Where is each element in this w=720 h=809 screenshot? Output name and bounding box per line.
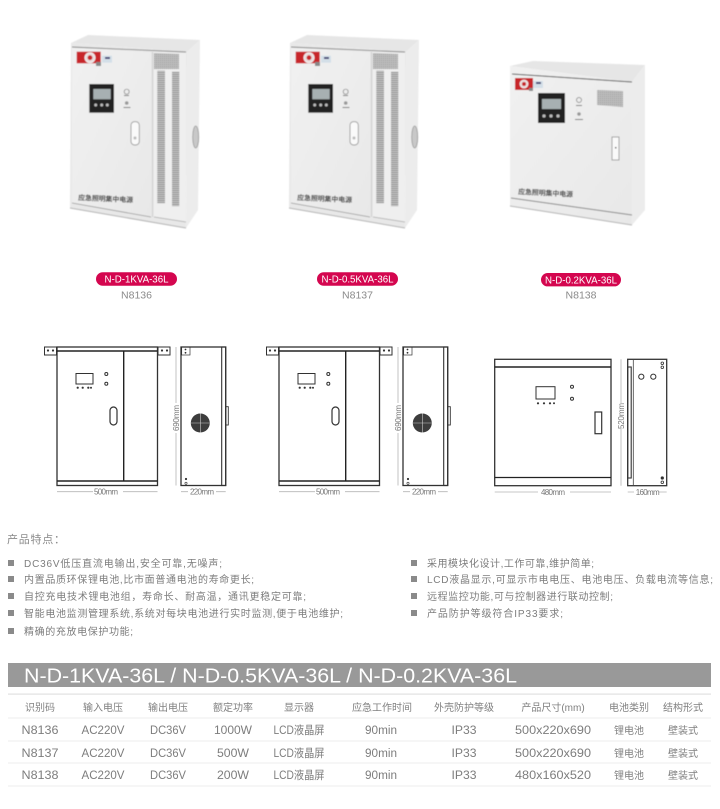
table header: 输出电压: [148, 701, 188, 714]
feature list: left column: 精确的充放电保护功能;: [24, 625, 133, 638]
model tag: N-D-0.2KVA-36L: N-D-0.2KVA-36L: [545, 275, 617, 286]
feature list: right column: 采用模块化设计,工作可靠,维护简单;: [427, 557, 594, 570]
table header: 外壳防护等级: [434, 701, 494, 714]
table row: N8138: N8138: [22, 770, 58, 782]
feature list: right column: LCD液晶显示,可显示市电电压、电池电压、负载电流等信息;: [427, 573, 713, 586]
feature list: right column: 远程监控功能,可与控制器进行联动控制;: [427, 590, 613, 603]
table header: 识别码: [25, 702, 55, 714]
feature list: left column: [8, 557, 343, 638]
table row: N8138: 壁装式: [668, 769, 698, 782]
cabinet label: 应急照明集中电源: [78, 193, 133, 204]
table row: N8136: DC36V: [150, 725, 186, 737]
dimension drawing: N8137: 220mm: [412, 488, 436, 496]
table row: N8138: 480x160x520: [515, 770, 591, 782]
model tag: N-D-1KVA-36L: N-D-1KVA-36L: [104, 275, 169, 286]
table header: 输入电压: [83, 701, 123, 714]
feature list: left column: 智能电池监测管理系统,系统对每块电池进行实时监测,便于电池维护;: [24, 607, 343, 620]
dimension drawing: N8138: 160mm: [636, 488, 660, 497]
table row: N8136: 壁装式: [668, 724, 698, 737]
table row: N8136: [22, 723, 698, 737]
table row: N8136: LCD液晶屏: [274, 723, 324, 737]
table row: N8138: LCD液晶屏: [274, 768, 324, 782]
feature list: right column: [411, 557, 713, 620]
table header: 产品尺寸(mm): [521, 701, 585, 714]
table row: N8137: [22, 746, 698, 760]
table header: 结构形式: [663, 701, 703, 714]
table row: N8137: N8137: [22, 748, 58, 760]
table header: 额定功率: [213, 701, 253, 714]
table row: N8137: AC220V: [82, 748, 125, 760]
table row: N8138: 90min: [365, 770, 397, 782]
dimension drawing: N8136: 500mm: [94, 488, 118, 496]
feature list: right column: 产品防护等级符合IP33要求;: [427, 607, 563, 620]
table header: 电池类别: [609, 701, 649, 714]
dimension drawing: N8138: [495, 359, 667, 497]
table row: N8138: 锂电池: [614, 769, 644, 782]
heading: features: 产品特点：: [7, 532, 65, 546]
feature list: left column: DC36V低压直流电输出,安全可靠,无噪声;: [24, 557, 222, 570]
dimension drawing: N8136: 220mm: [190, 488, 214, 496]
product code: N8137: N8137: [342, 290, 373, 302]
model tag: N-D-0.5KVA-36L: N-D-0.5KVA-36L: [322, 275, 394, 286]
table row: N8137: 壁装式: [668, 747, 698, 760]
product code: N8138: N8138: [566, 290, 597, 302]
dimension drawing: N8138: 480mm: [541, 488, 565, 497]
product code: N8136: N8136: [121, 290, 152, 302]
title bar: [8, 663, 711, 688]
table row: N8137: 锂电池: [614, 747, 644, 760]
table row: N8137: 500W: [217, 748, 249, 760]
model tag: N-D-1KVA-36L: [96, 272, 177, 286]
table row: N8138: IP33: [452, 770, 476, 782]
feature list: left column: 内置品质环保锂电池,比市面普通电池的寿命更长;: [24, 573, 254, 586]
table row: N8136: 1000W: [214, 725, 252, 737]
dimension drawing: N8137: [266, 347, 450, 496]
table header: [25, 701, 703, 714]
table header: 显示器: [284, 702, 314, 714]
product: cabinet N8138: [510, 61, 645, 225]
table row: N8136: 90min: [365, 725, 397, 737]
table row: N8138: AC220V: [82, 770, 125, 782]
table row: N8137: 90min: [365, 748, 397, 760]
product: cabinet N8137: [289, 35, 419, 228]
dimension drawing: N8138: 520mm: [617, 403, 626, 429]
table row: N8136: IP33: [452, 725, 476, 737]
title bar: N-D-1KVA-36L / N-D-0.5KVA-36L / N-D-0.2KVA-36L: [24, 666, 517, 688]
table row: N8137: LCD液晶屏: [274, 746, 324, 760]
table row: N8136: 锂电池: [614, 724, 644, 737]
feature list: left column: 自控充电技术锂电池组，寿命长、耐高温，通讯更稳定可靠;: [24, 590, 306, 603]
table header: 应急工作时间: [352, 701, 412, 714]
dimension drawing: N8137: 500mm: [316, 488, 340, 496]
table row: N8137: 500x220x690: [515, 748, 591, 760]
table row: N8138: [22, 768, 698, 782]
table row: N8136: AC220V: [82, 725, 125, 737]
cabinet label: 应急照明集中电源: [518, 187, 573, 199]
cabinet label: 应急照明集中电源: [297, 193, 352, 204]
table row: N8138: DC36V: [150, 770, 186, 782]
dimension drawing: N8136: 690mm: [172, 405, 181, 431]
table row: N8137: DC36V: [150, 748, 186, 760]
table row: N8136: N8136: [22, 725, 58, 737]
dimension drawing: N8137: 690mm: [394, 405, 403, 431]
dimension drawing: N8136: [44, 347, 228, 496]
table row: N8137: IP33: [452, 748, 476, 760]
table row: N8138: 200W: [217, 770, 249, 782]
table row: N8136: 500x220x690: [515, 725, 591, 737]
specification table: [8, 694, 711, 786]
product: cabinet N8136: [70, 35, 200, 228]
